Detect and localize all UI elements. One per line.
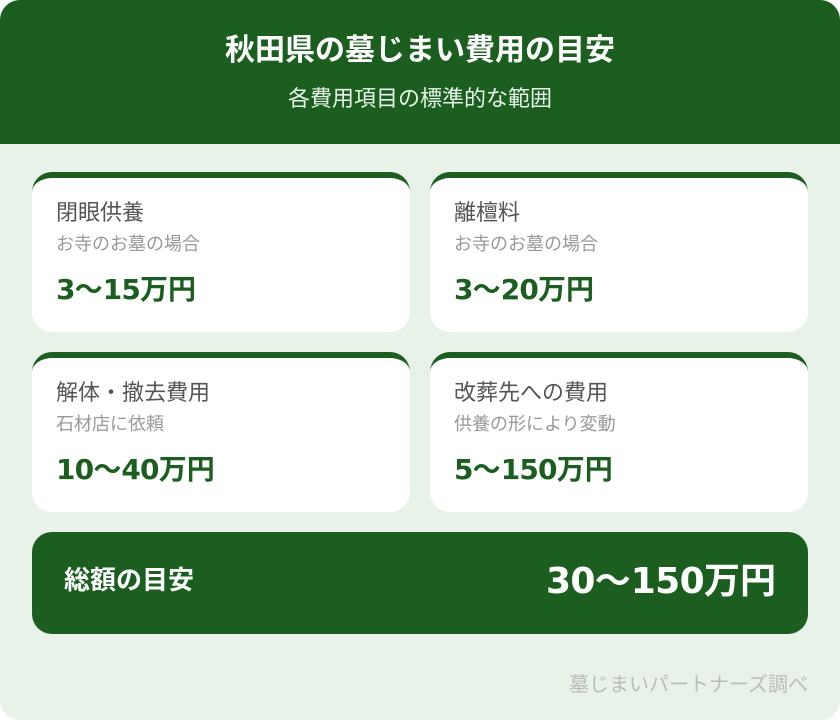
subtitle: 各費用項目の標準的な範囲 xyxy=(288,87,552,112)
card note: 石材店に依頼 xyxy=(56,414,164,435)
card value: 3〜15万円 xyxy=(56,273,196,306)
total value: 30〜150万円 xyxy=(546,561,776,602)
panel: temple departure fee xyxy=(430,172,808,332)
card label: 離檀料 xyxy=(454,201,520,226)
card note: 供養の形により変動 xyxy=(454,414,616,435)
card value: 3〜20万円 xyxy=(454,273,594,306)
card label: 改葬先への費用 xyxy=(454,381,608,406)
card note: お寺のお墓の場合 xyxy=(454,234,598,255)
card label: 閉眼供養 xyxy=(56,201,144,226)
card value: 10〜40万円 xyxy=(56,453,215,486)
panel: reburial destination cost xyxy=(430,352,808,512)
card label: 解体・撤去費用 xyxy=(56,381,210,406)
total label: 総額の目安 xyxy=(64,566,194,596)
panel: closing ceremony cost xyxy=(32,172,410,332)
card value: 5〜150万円 xyxy=(454,453,613,486)
card note: お寺のお墓の場合 xyxy=(56,234,200,255)
panel: total estimate xyxy=(32,532,808,634)
source note: 墓じまいパートナーズ調べ xyxy=(569,672,808,696)
title: 秋田県の墓じまい費用の目安 xyxy=(225,33,615,68)
panel: demolition cost xyxy=(32,352,410,512)
header band xyxy=(0,0,840,144)
